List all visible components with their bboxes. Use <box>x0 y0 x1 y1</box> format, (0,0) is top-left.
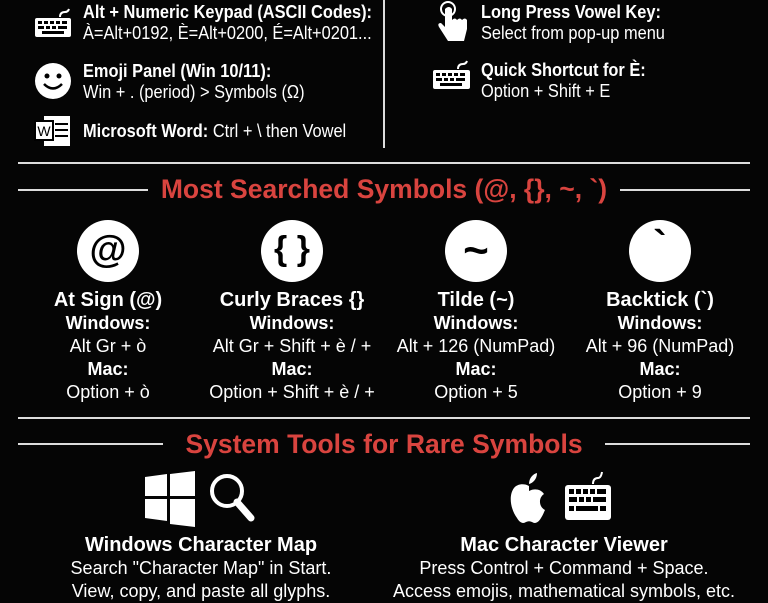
icon: apple + keyboard <box>510 472 611 523</box>
panel: tilde: Windows: <box>434 313 518 333</box>
panel: curly braces: Windows: <box>250 313 334 333</box>
panel: at sign: At Sign (@) <box>54 289 162 311</box>
text: emoji panel <box>83 61 305 102</box>
panel: curly braces: Mac: <box>271 359 312 379</box>
heading: system tools: System Tools for Rare Symbols <box>185 429 583 459</box>
icon: keyboard <box>35 8 71 37</box>
panel: at sign: Alt Gr + ò <box>70 336 146 356</box>
text: alt numeric: Alt + Numeric Keypad (ASCII Codes): <box>83 2 372 22</box>
icon: word <box>36 116 70 146</box>
panel: tilde <box>396 220 555 402</box>
icon: windows + search <box>145 471 254 527</box>
text: windows char map <box>71 534 331 601</box>
text: mac char viewer <box>393 534 735 601</box>
panel: curly braces: { } <box>274 230 310 268</box>
text: long press: Select from pop-up menu <box>481 23 665 43</box>
icon: keyboard 2 <box>433 60 470 89</box>
text: emoji panel: Emoji Panel (Win 10/11): <box>83 61 271 81</box>
text: quick shortcut: Quick Shortcut for È: <box>481 60 646 80</box>
panel: at sign: Mac: <box>87 359 128 379</box>
icon: word: W <box>37 123 51 139</box>
panel: curly braces <box>209 220 375 402</box>
text: windows char map: Search "Character Map" in Start. <box>71 558 331 578</box>
text: quick shortcut <box>481 60 646 101</box>
panel: backtick: ` <box>653 223 667 267</box>
text: emoji panel: Win + . (period) > Symbols (Ω) <box>83 82 305 102</box>
text: windows char map: View, copy, and paste all glyphs. <box>72 581 330 601</box>
panel: at sign: Option + ò <box>66 382 150 402</box>
panel: at sign <box>54 220 162 402</box>
text: long press <box>481 2 665 43</box>
panel: backtick <box>586 220 734 402</box>
panel: backtick: Mac: <box>639 359 680 379</box>
text: mac char viewer: Access emojis, mathematical symbols, etc. <box>393 581 735 601</box>
panel: backtick: Alt + 96 (NumPad) <box>586 336 734 356</box>
panel: curly braces: Alt Gr + Shift + è / + <box>213 336 371 356</box>
text: windows char map: Windows Character Map <box>85 534 317 556</box>
heading: most searched: Most Searched Symbols (@, {}, ~, `) <box>161 174 607 204</box>
text: alt numeric: À=Alt+0192, È=Alt+0200, É=Alt+0201... <box>83 23 372 43</box>
text: long press: Long Press Vowel Key: <box>481 2 661 22</box>
text: alt numeric <box>83 2 372 43</box>
panel: at sign: Windows: <box>66 313 150 333</box>
text: mac char viewer: Mac Character Viewer <box>460 534 668 556</box>
panel: curly braces: Curly Braces {} <box>220 289 364 311</box>
panel: tilde: ~ <box>463 226 489 275</box>
panel: at sign: @ <box>89 229 127 271</box>
panel: backtick: Backtick (`) <box>606 289 714 311</box>
panel: tilde: Mac: <box>455 359 496 379</box>
text: mac char viewer: Press Control + Command + Space. <box>419 558 709 578</box>
icon: finger <box>438 1 467 41</box>
panel: tilde: Tilde (~) <box>438 289 514 311</box>
icon: smiley <box>35 63 71 99</box>
panel: curly braces: Option + Shift + è / + <box>209 382 375 402</box>
text: quick shortcut: Option + Shift + E <box>481 81 610 101</box>
divider vertical <box>383 0 385 148</box>
panel: tilde: Alt + 126 (NumPad) <box>397 336 555 356</box>
panel: backtick: Windows: <box>618 313 702 333</box>
panel: backtick: Option + 9 <box>618 382 702 402</box>
text: word: Microsoft Word: Ctrl + \ then Vowel <box>83 121 346 141</box>
panel: tilde: Option + 5 <box>434 382 518 402</box>
